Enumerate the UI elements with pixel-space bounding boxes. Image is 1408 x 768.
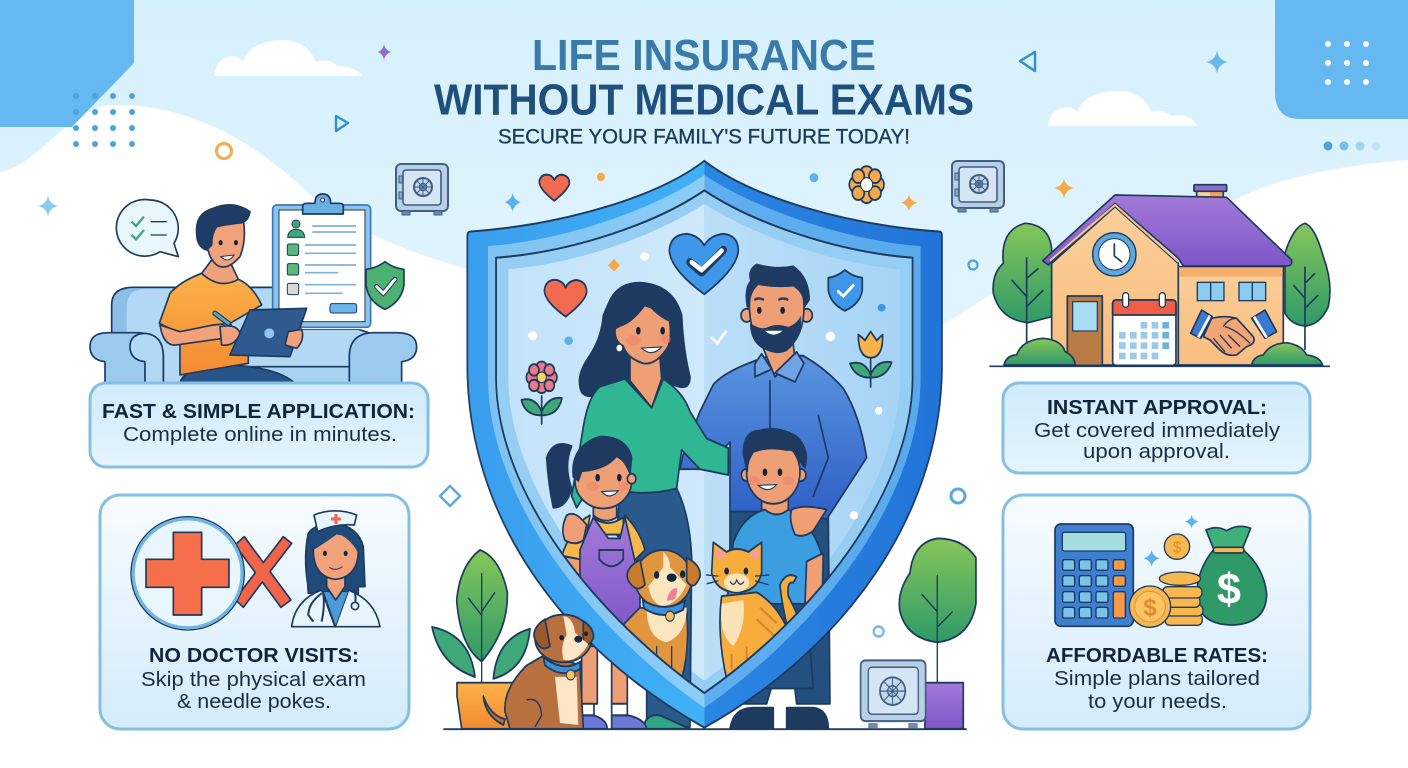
shield field xyxy=(496,190,913,693)
man xyxy=(680,263,867,729)
nurse xyxy=(292,511,380,627)
walls xyxy=(1052,207,1283,365)
clipboard xyxy=(273,194,371,327)
small dots and stars inside shield xyxy=(528,252,886,520)
money bag: $ xyxy=(1217,566,1241,614)
icon: tulip xyxy=(850,332,892,387)
cat xyxy=(706,542,800,679)
description: & needle pokes. xyxy=(177,690,331,713)
small brown dog xyxy=(483,615,594,729)
cloud: left xyxy=(214,40,362,76)
money bag xyxy=(1197,526,1267,625)
shield ring xyxy=(467,161,942,728)
coin small xyxy=(1164,534,1190,559)
icon: safe top right xyxy=(952,161,1004,212)
card: approval text: upon approval. xyxy=(1083,440,1230,463)
dog in shield xyxy=(617,550,700,679)
description: to your needs. xyxy=(1088,690,1227,713)
speech bubble xyxy=(116,199,178,257)
coin large: $ xyxy=(1143,594,1157,621)
sparkles xyxy=(1144,515,1198,567)
clock xyxy=(1093,233,1136,276)
coin stack xyxy=(1159,572,1203,625)
panel: affordable rates xyxy=(1003,495,1310,729)
small ring xyxy=(874,627,884,637)
panel: fast and simple application xyxy=(90,194,428,467)
coin small: $ xyxy=(1173,539,1182,556)
heading: AFFORDABLE RATES: xyxy=(1046,644,1268,667)
description: Simple plans tailored xyxy=(1054,667,1260,690)
illustration: house with clock, calendar and handshake xyxy=(989,185,1330,366)
panel: instant approval xyxy=(989,185,1330,473)
icon: safe top left xyxy=(396,164,448,215)
illustration: cross, X and nurse xyxy=(131,511,380,630)
card background xyxy=(100,495,409,729)
card: approval text: Get covered immediately xyxy=(1034,419,1281,442)
corner shape: top right xyxy=(1275,0,1408,119)
subtitle: SECURE YOUR FAMILY'S FUTURE TODAY! xyxy=(498,124,910,148)
cloud: right xyxy=(1048,91,1197,126)
icon: red heart xyxy=(544,280,587,317)
card: application text xyxy=(90,383,428,467)
description xyxy=(141,668,366,713)
ground line xyxy=(989,364,1330,369)
girl xyxy=(547,437,647,729)
icon: blue heart check xyxy=(669,234,738,294)
description xyxy=(1054,667,1260,713)
roof xyxy=(1043,195,1292,266)
icon: mini shield xyxy=(828,270,862,311)
title xyxy=(434,31,974,124)
man xyxy=(159,205,307,383)
description: Skip the physical exam xyxy=(141,668,366,691)
title: WITHOUT MEDICAL EXAMS xyxy=(434,76,974,124)
door xyxy=(1067,296,1102,365)
decorations above shield xyxy=(505,166,917,212)
card background xyxy=(1003,495,1310,729)
dot grid: top right xyxy=(1325,41,1369,85)
card: application text: FAST & SIMPLE APPLICATION: xyxy=(102,400,415,423)
icon: medical cross in ring xyxy=(131,517,244,630)
bushes xyxy=(1004,338,1323,365)
heading: NO DOCTOR VISITS: xyxy=(149,644,359,667)
card: approval text xyxy=(1003,383,1310,473)
dot grid: top left xyxy=(73,93,135,147)
trees xyxy=(993,223,1330,350)
corner shape: top left xyxy=(0,0,134,127)
calendar xyxy=(1113,293,1176,365)
sofa xyxy=(90,287,417,387)
coin large xyxy=(1129,586,1171,627)
card: application text: Complete online in minutes. xyxy=(123,423,397,446)
chimney xyxy=(1194,185,1227,222)
windows xyxy=(1197,282,1266,301)
ground line xyxy=(443,727,967,732)
icon: red X xyxy=(235,537,292,607)
handshake xyxy=(1191,310,1277,355)
right tree and pot xyxy=(899,538,976,729)
calculator xyxy=(1055,524,1133,626)
icon: safe bottom xyxy=(861,660,926,728)
panel: no doctor visits xyxy=(100,495,409,729)
title: LIFE INSURANCE xyxy=(532,31,876,80)
central shield with family xyxy=(432,161,976,729)
illustration: man on sofa with clipboard xyxy=(90,194,417,387)
card: approval text: INSTANT APPROVAL: xyxy=(1047,396,1267,419)
woman xyxy=(572,283,728,729)
pagination dots xyxy=(1324,142,1380,150)
green shield xyxy=(366,262,404,309)
boy xyxy=(727,429,827,688)
illustration: calculator, coins and money bag xyxy=(1055,515,1267,627)
decorative sparkles and rings xyxy=(38,44,1228,506)
icon: pink flower xyxy=(521,362,562,424)
left potted plant xyxy=(432,550,530,729)
